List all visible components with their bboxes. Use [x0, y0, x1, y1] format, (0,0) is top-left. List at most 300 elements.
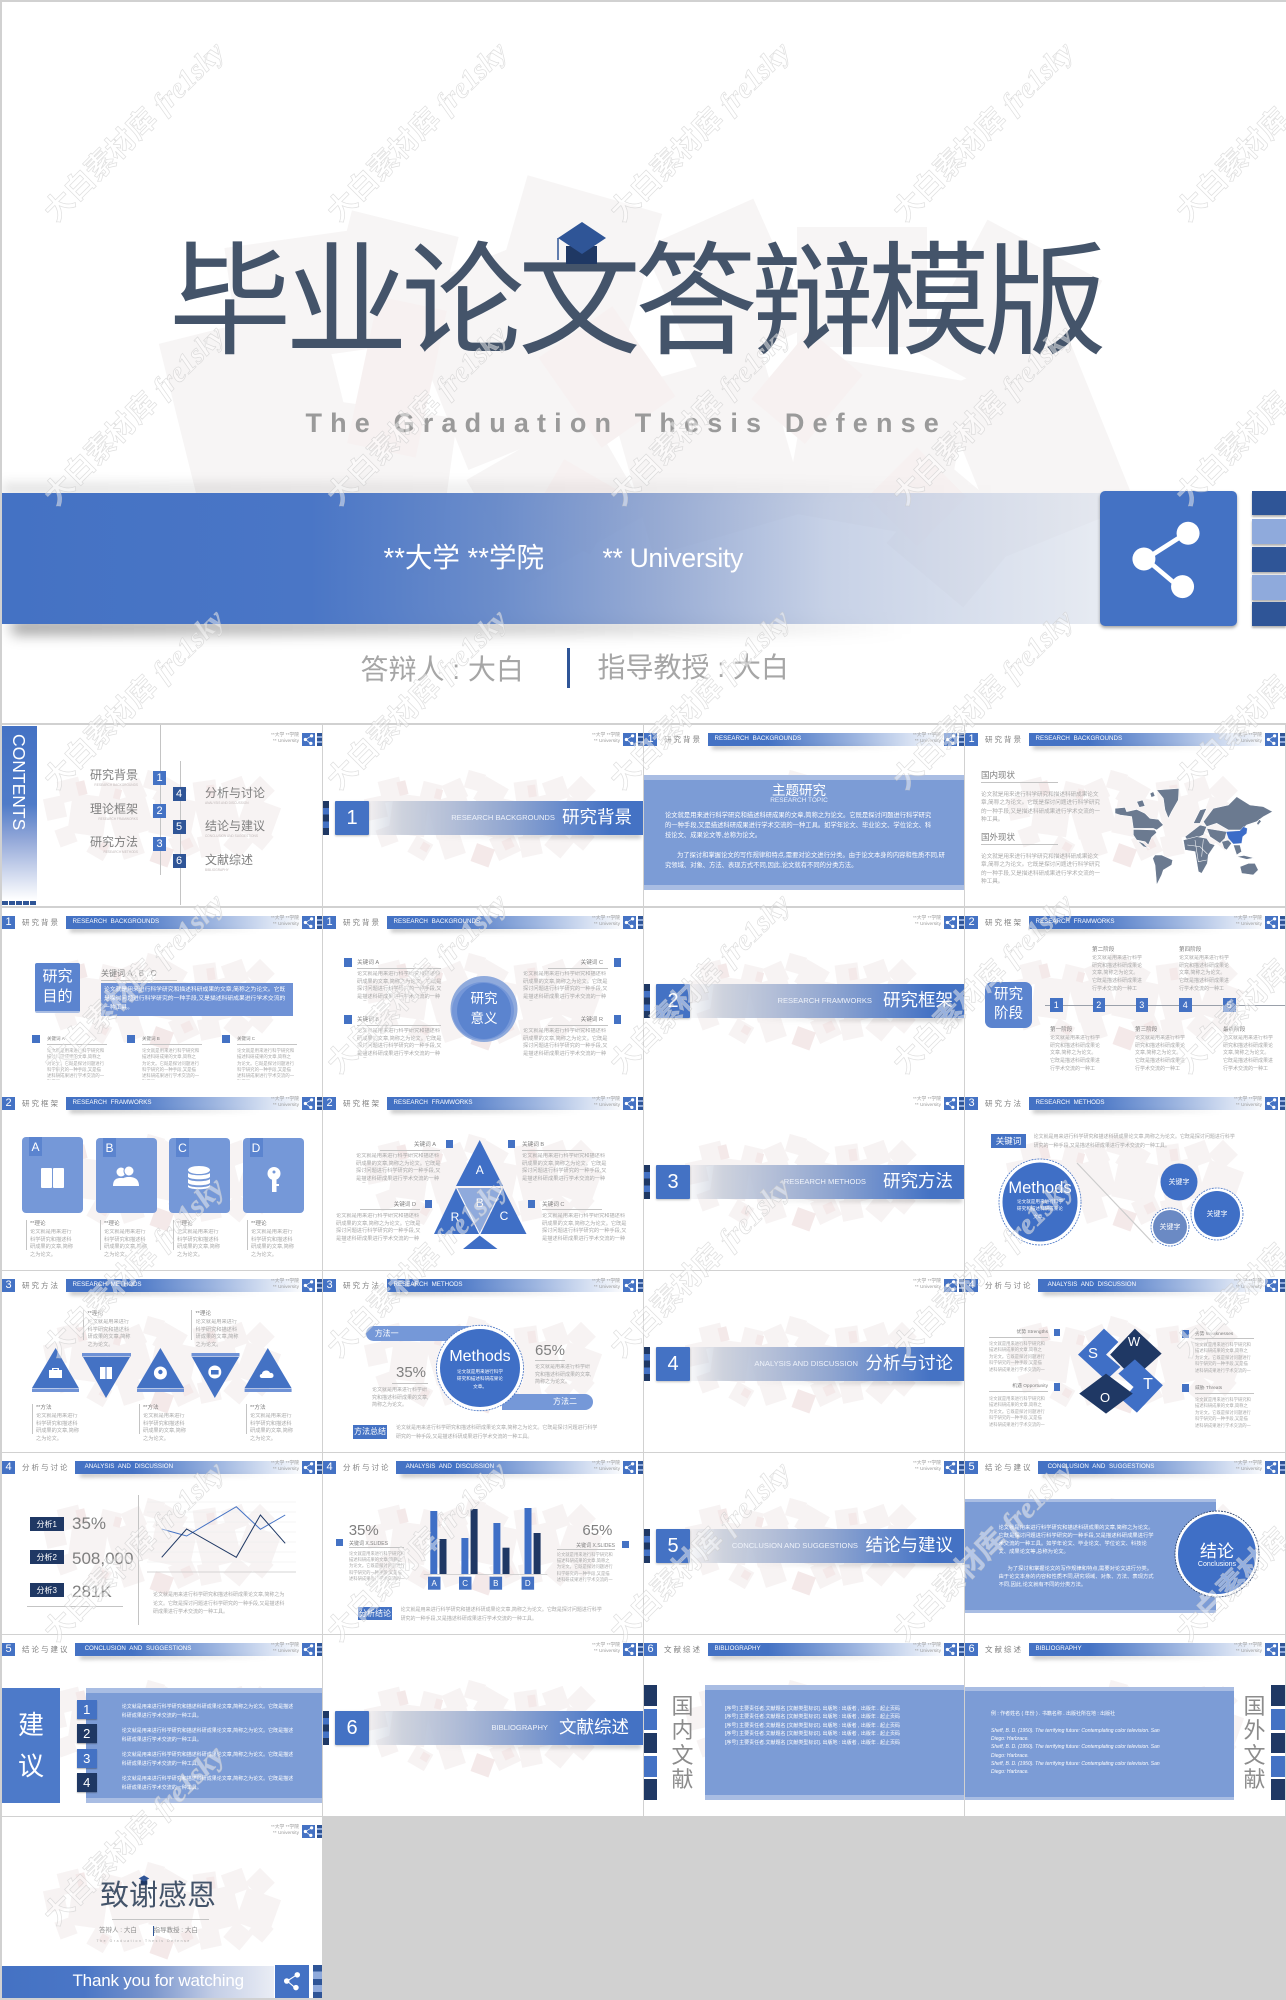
opportunity — [989, 1381, 1061, 1427]
stage 2 — [1092, 998, 1105, 1012]
bar chart: B — [493, 1579, 498, 1588]
corner mark — [585, 1095, 643, 1111]
citations: Diego: Harbrace. — [991, 1736, 1029, 1742]
header: BIBLIOGRAPHY — [1036, 1645, 1082, 1652]
top method 1: 论文就是用来进行科学研究和描述科研成果的文章,简称之为论文。 — [88, 1319, 130, 1348]
section banner — [644, 984, 964, 1024]
foreign label: 外 — [1243, 1718, 1266, 1743]
card C — [169, 1138, 230, 1213]
keyword heading — [101, 969, 177, 981]
panel: cover slide — [2, 2, 1286, 723]
watermark: 大白素材库 fre1sky — [604, 35, 797, 228]
card A — [22, 1137, 83, 1213]
header: 研究背景 — [985, 735, 1023, 744]
header: 分析与讨论 — [22, 1463, 70, 1472]
keyword circle 1: 关键字 — [1168, 1179, 1190, 1186]
card D: D — [252, 1140, 260, 1154]
item 4: ANALYSIS AND DISCUSSION — [205, 801, 249, 805]
item 1 — [77, 1700, 299, 1720]
header: 3 — [5, 1279, 12, 1291]
corner mark: **大学 **学院 — [592, 1643, 620, 1648]
header — [323, 1461, 623, 1474]
corner mark: ** University — [915, 1467, 941, 1472]
stages box: 阶段 — [994, 1006, 1023, 1022]
header: 2 — [326, 1097, 333, 1109]
theory C: **理论 — [177, 1221, 193, 1227]
header: 研究方法 — [985, 1099, 1023, 1108]
stage 4 — [1179, 998, 1192, 1012]
letter O: O — [1100, 1390, 1110, 1404]
top method 2: **理论 — [196, 1311, 211, 1317]
watermark: 大白素材库 fre1sky — [887, 1455, 1080, 1648]
watermark: 大白素材库 fre1sky — [321, 887, 514, 1080]
theory D — [247, 1219, 297, 1261]
header — [2, 916, 298, 934]
corner mark: ** University — [915, 922, 941, 927]
watermark: 大白素材库 fre1sky — [321, 35, 514, 228]
theory A — [26, 1219, 76, 1261]
corner mark — [906, 1459, 964, 1475]
header: 1 — [5, 916, 12, 928]
methods text: 论文就是用来进行科学研究和描述科研成果论文章。 — [1017, 1199, 1063, 1219]
strengths — [989, 1327, 1061, 1373]
circles diagram — [965, 1089, 1285, 1269]
section banner: 研究框架 — [883, 990, 953, 1010]
corner mark — [1227, 1277, 1285, 1293]
corner mark — [592, 914, 643, 929]
watermark: 大白素材库 fre1sky — [321, 319, 514, 512]
corner mark — [1234, 914, 1285, 929]
stage 2: 2 — [1096, 1000, 1101, 1010]
contents label: CONTENTS — [9, 734, 29, 830]
significance circle — [450, 976, 518, 1042]
header: RESEARCH BACKGROUNDS — [394, 918, 480, 925]
corner mark: ** University — [273, 922, 299, 927]
keyword circle 2: 关键字 — [1206, 1211, 1228, 1218]
section banner: ANALYSIS AND DISCUSSION — [754, 1359, 858, 1368]
theory D: 论文就是用来进行科学研究和描述科研成果的文章,简称之为论文。 — [251, 1229, 294, 1258]
suggestion panel — [86, 1688, 322, 1803]
right stat: 关键词 X.SLIDES — [576, 1542, 615, 1548]
header: 2 — [5, 1097, 12, 1109]
conclusion panel — [965, 1499, 1216, 1613]
block D — [336, 1199, 433, 1247]
bottom method 1: **方法 — [36, 1405, 52, 1411]
slide: SWOT — [965, 1271, 1284, 1452]
header: CONCLUSION AND SUGGESTIONS — [1048, 1463, 1154, 1470]
world map — [1115, 788, 1272, 884]
citations: Diego: Harbrace. — [991, 1769, 1029, 1775]
panel body 2: 为了探讨和掌握论文的写作规律和特点,需要对论文进行分类。由于论文本身的内容和性质不同,研究领域、对象、方法、表现方式不同,因此,论文就有不同的分类方法。 — [665, 852, 945, 869]
corner mark — [1234, 732, 1285, 746]
aim box: 目的 — [42, 988, 72, 1005]
corner mark: ** University — [594, 1649, 620, 1654]
watermark: 大白素材库 fre1sky — [887, 603, 1080, 796]
conclusion english: Conclusions — [1198, 1560, 1236, 1568]
corner mark: **大学 **学院 — [592, 1461, 620, 1466]
section banner: RESEARCH FRAMWORKS — [777, 996, 872, 1005]
weakness — [1182, 1330, 1254, 1376]
corner mark — [585, 1641, 643, 1657]
triangle diagram — [323, 1089, 643, 1269]
watermark: 大白素材库 fre1sky — [887, 35, 1080, 228]
corner mark — [906, 1641, 964, 1657]
thank-you banner — [2, 1966, 274, 1998]
corner mark: ** University — [1236, 1467, 1262, 1472]
header: 1 — [326, 916, 333, 928]
citations — [725, 1705, 925, 1747]
section banner: 研究方法 — [883, 1171, 953, 1191]
stage 3: 3 — [1139, 1000, 1144, 1010]
watermark: 大白素材库 fre1sky — [38, 319, 231, 512]
header — [2, 1643, 302, 1656]
header — [965, 1643, 1265, 1656]
item 1: 论文就是用来进行科学研究和描述科研成果论文章,简称之为论文。它既是描述科研成果进行学术交流的一种工具。 — [122, 1704, 293, 1719]
theory C: 论文就是用来进行科学研究和描述科研成果的文章,简称之为论文。 — [177, 1229, 220, 1258]
icon: share box — [275, 1965, 309, 1998]
pill: method one — [366, 1326, 469, 1341]
header: 研究背景 — [22, 918, 60, 927]
methods circle — [435, 1324, 525, 1412]
header: RESEARCH METHODS — [1036, 1099, 1105, 1106]
corner mark: **大学 **学院 — [913, 1097, 941, 1102]
section banner: RESEARCH METHODS — [784, 1177, 866, 1186]
corner mark: ** University — [273, 1467, 299, 1472]
triangle diagram: R — [451, 1210, 460, 1224]
domestic label: 献 — [671, 1767, 694, 1792]
header — [965, 1279, 1265, 1292]
item 2: RESEARCH FRAMWORKS — [98, 817, 138, 821]
slide: section 1 — [323, 725, 642, 906]
corner mark: **大学 **学院 — [271, 1097, 299, 1102]
column C — [222, 1035, 297, 1080]
corner mark — [906, 1095, 964, 1111]
block D — [523, 1015, 621, 1058]
block C: 关键词 C — [542, 1202, 564, 1208]
citations: [序号] 主要责任者.文献题名 [文献类型标识]. 出版地 : 出版者 , 出版年 . 起止页码 — [725, 1714, 900, 1720]
corner mark: **大学 **学院 — [1234, 1279, 1262, 1284]
stage text: fourth: 第四阶段 — [1179, 947, 1201, 953]
header: 研究框架 — [985, 918, 1023, 927]
watermark: 大白素材库 fre1sky — [887, 887, 1080, 1080]
stage 5 — [1223, 998, 1236, 1012]
background squares — [159, 176, 1130, 493]
summary tag: 分析结论 — [359, 1609, 391, 1618]
item 5: 5 — [176, 821, 182, 833]
bottom method 3 — [246, 1403, 296, 1445]
header — [323, 1097, 623, 1110]
section banner: 2 — [667, 990, 679, 1012]
corner mark: ** University — [273, 1649, 299, 1654]
corner mark — [585, 1277, 643, 1293]
aim box — [35, 963, 80, 1013]
header — [2, 1097, 302, 1110]
bottom method 1 — [32, 1403, 82, 1445]
header: RESEARCH METHODS — [72, 1281, 142, 1288]
corner mark: **大学 **学院 — [271, 1825, 299, 1830]
35 percent — [372, 1364, 432, 1414]
keyword tag — [991, 1134, 1026, 1148]
slide: section 4 — [644, 1271, 964, 1452]
slide: domestic literature — [644, 1635, 964, 1816]
item 5 — [173, 819, 265, 838]
keyword tag: 关键词 — [996, 1136, 1021, 1146]
section banner: RESEARCH BACKGROUNDS — [451, 813, 555, 822]
item 4: 论文就是用来进行科学研究和描述科研成果论文章,简称之为论文。它既是描述科研成果进行学术交流的一种工具。 — [122, 1776, 293, 1791]
header: 6 — [968, 1643, 975, 1655]
keyword heading: 关键词 A , B , C — [101, 969, 157, 978]
foreign status: 论文就是用来进行科学研究和描述科研成果论文章,简称之为论文。它既是探讨问题进行科学研究的一种手段,又是描述科研成果进行学术交流的一种工具。 — [981, 854, 1100, 885]
slide: foreign literature — [965, 1635, 1284, 1816]
item 3: 论文就是用来进行科学研究和描述科研成果论文章,简称之为论文。它既是描述科研成果进行学术交流的一种工具。 — [122, 1752, 293, 1767]
section banner — [323, 1705, 643, 1755]
section banner: BIBLIOGRAPHY — [491, 1723, 548, 1732]
summary text: 论文就是用来进行科学研究和描述科研成果论文章,简称之为论文。它既是探讨问题进行科学研究的一种手段,又是描述科研成果进行学术交流的一种工具。 — [396, 1425, 597, 1440]
item 1: RESEARCH BACKGROUNDS — [94, 783, 138, 787]
corner mark — [271, 914, 322, 929]
block B — [344, 1015, 442, 1058]
foreign label: 文 — [1243, 1743, 1266, 1768]
bar chart: D — [525, 1579, 531, 1588]
block B: 关键词 B — [357, 1017, 379, 1023]
stage text: first: 第一阶段 — [1050, 1027, 1072, 1033]
corner mark: **大学 **学院 — [271, 916, 299, 921]
watermark: 大白素材库 fre1sky — [887, 319, 1080, 512]
suggestion side box: 建 — [18, 1710, 44, 1740]
bottom method 2: **方法 — [143, 1405, 159, 1411]
metric 1: 分析1 — [37, 1520, 57, 1528]
panel english heading: RESEARCH TOPIC — [770, 797, 828, 804]
item 6: 文献综述 — [205, 853, 253, 867]
corner mark: ** University — [915, 1649, 941, 1654]
header: 1 — [647, 733, 654, 745]
header: 2 — [968, 916, 975, 928]
card D — [242, 1138, 304, 1213]
methods title: Methods — [1008, 1178, 1072, 1196]
item 2: 2 — [156, 805, 163, 817]
pill: method one: 方法一 — [375, 1329, 399, 1338]
item 6 — [173, 853, 253, 872]
advisor: 指导教授 : 大白 — [154, 1927, 198, 1934]
significance circle: 意义 — [470, 1011, 498, 1026]
domestic label: 内 — [671, 1718, 694, 1743]
citations: [序号] 主要责任者.文献题名 [文献类型标识]. 出版地 : 出版者 , 出版年 . 起止页码 — [725, 1731, 900, 1737]
domestic status — [981, 770, 1100, 823]
corner mark: ** University — [1236, 1103, 1262, 1108]
header: ANALYSIS AND DISCUSSION — [85, 1463, 173, 1470]
block D: 关键词 R — [581, 1017, 603, 1023]
foreign label: 国 — [1243, 1694, 1266, 1719]
side bar squares — [2, 901, 36, 905]
slide: research topic — [644, 725, 964, 906]
corner mark — [913, 914, 964, 929]
slide: conclusion — [965, 1453, 1284, 1634]
metric 1: 35% — [72, 1514, 106, 1533]
header: RESEARCH BACKGROUNDS — [72, 918, 159, 925]
65 percent — [535, 1342, 595, 1392]
item 6: 6 — [176, 855, 182, 867]
section banner: 3 — [667, 1171, 679, 1193]
section banner: 文献综述 — [559, 1717, 629, 1737]
stacked blocks — [1250, 491, 1286, 630]
watermark: 大白素材库 fre1sky — [887, 1171, 1080, 1364]
corner mark — [264, 1459, 322, 1475]
watermark: 大白素材库 fre1sky — [38, 887, 231, 1080]
bottom method 3: 论文就是用来进行科学研究和描述科研成果的文章,简称之为论文。 — [250, 1413, 293, 1442]
corner mark: ** University — [273, 1103, 299, 1108]
theory D: **理论 — [251, 1221, 267, 1227]
slide: research stages — [965, 908, 1284, 1088]
header: 4 — [968, 1279, 975, 1291]
header — [644, 1643, 944, 1656]
header: 研究框架 — [22, 1099, 60, 1108]
banner — [2, 493, 1102, 624]
section banner: CONCLUSION AND SUGGESTIONS — [732, 1541, 858, 1550]
opportunity: 机遇 Opportunity — [1012, 1384, 1048, 1389]
panel heading: 主题研究 — [772, 783, 826, 798]
corner mark: **大学 **学院 — [271, 1279, 299, 1284]
corner mark: ** University — [594, 1467, 620, 1472]
divider — [152, 1926, 154, 1936]
header: 分析与讨论 — [985, 1281, 1032, 1290]
35 percent: 论文就是用来进行科学研究和描述科研成果的文章,简称之为论文。 — [372, 1387, 428, 1408]
header: RESEARCH FRAMWORKS — [1036, 918, 1115, 925]
header: RESEARCH BACKGROUNDS — [1036, 735, 1122, 742]
corner mark: **大学 **学院 — [592, 916, 620, 921]
corner mark: **大学 **学院 — [1234, 1461, 1262, 1466]
letter W: W — [1128, 1334, 1140, 1348]
corner mark — [1227, 1459, 1285, 1475]
header: ANALYSIS AND DISCUSSION — [406, 1463, 494, 1470]
watermark: 大白素材库 fre1sky — [38, 35, 231, 228]
top method 2 — [191, 1309, 241, 1351]
side blocks — [644, 1685, 657, 1800]
keyword panel — [101, 983, 293, 1016]
item 5: CONCLUSION AND SUGGESTIONS — [205, 834, 258, 838]
section banner: 研究背景 — [562, 807, 632, 827]
thanks title: 致谢感恩 — [100, 1880, 216, 1912]
corner mark: **大学 **学院 — [1234, 1097, 1262, 1102]
panel body: 论文就是用来进行科学研究和描述科研成果的文章,简称之为论文。它既是探讨问题进行科学研究的一种手段,又是描述科研成果进行学术交流的一种工具。如学年论文、毕业论文、学位论文、科技论文、成果论文等,总称为论文。 — [665, 812, 931, 839]
column B — [127, 1035, 202, 1080]
section banner: 6 — [346, 1717, 358, 1739]
item 4 — [173, 786, 265, 805]
corner mark: ** University — [594, 739, 620, 744]
stage 3 — [1136, 998, 1148, 1012]
keyword text: 论文就是用来进行科学研究和描述科研成果论文章,简称之为论文。它既是探讨问题进行科学研究的一种手段,又是描述科研成果进行学术交流的一种工具。 — [1034, 1134, 1235, 1149]
header: 研究方法 — [343, 1281, 381, 1290]
citations: Diego: Harbrace. — [991, 1753, 1029, 1759]
section banner: 4 — [667, 1353, 679, 1375]
65 percent: 65% — [535, 1342, 565, 1359]
item 2: 论文就是用来进行科学研究和描述科研成果论文章,简称之为论文。它既是描述科研成果进行学术交流的一种工具。 — [122, 1728, 293, 1743]
title: 毕业论文答辩模版 — [168, 234, 1100, 371]
left stat — [336, 1521, 406, 1586]
slide: research significance — [323, 908, 642, 1088]
conclusion circle — [1174, 1510, 1260, 1598]
thank-you banner: Thank you for watching — [72, 1971, 244, 1990]
defender: 答辩人 : 大白 — [99, 1927, 137, 1934]
header — [2, 1279, 302, 1292]
header: RESEARCH FRAMWORKS — [72, 1099, 152, 1106]
suggestion side box — [2, 1688, 60, 1803]
corner mark: ** University — [1236, 1649, 1262, 1654]
watermark: 大白素材库 fre1sky — [38, 1171, 231, 1364]
letter S: S — [1088, 1344, 1098, 1362]
column B: 关键词 B — [142, 1036, 160, 1041]
corner mark: **大学 **学院 — [592, 733, 620, 738]
summary text: 论文就是用来进行科学研究和描述科研成果论文章,简称之为论文。它既是探讨问题进行科学研究的一种手段,又是描述科研成果进行学术交流的一种工具。 — [400, 1607, 602, 1622]
header: 分析与讨论 — [343, 1463, 390, 1472]
slide: line chart — [2, 1453, 322, 1634]
item 3: 研究方法 — [90, 835, 138, 849]
chart text: 论文就是用来进行科学研究和描述科研成果论文章,简称之为论文。它既是探讨问题进行科学研究的一种手段,又是描述科研成果进行学术交流的一种工具。 — [153, 1592, 284, 1615]
domestic status: 论文就是用来进行科学研究和描述科研成果论文章,简称之为论文。它既是探讨问题进行科学研究的一种手段,又是描述科研成果进行学术交流的一种工具。 — [981, 792, 1100, 823]
stages box: 研究 — [994, 987, 1023, 1003]
citation format: 例 : 作者姓名 ( 年份 ) . 书籍名称 . 出版社所在地 : 出版社 — [991, 1711, 1115, 1717]
domestic label — [671, 1695, 694, 1793]
corner mark: **大学 **学院 — [271, 1461, 299, 1466]
slide: section 2 — [644, 908, 964, 1088]
block A: 关键词 A — [357, 960, 379, 966]
corner mark: **大学 **学院 — [1234, 733, 1262, 738]
item 5: 结论与建议 — [205, 819, 265, 833]
corner mark: ** University — [273, 739, 299, 744]
stage 1: 1 — [1054, 1000, 1059, 1010]
item 4: 4 — [176, 788, 182, 800]
section banner — [644, 1341, 964, 1391]
corner mark — [906, 1277, 964, 1293]
icon: share box — [1100, 491, 1236, 626]
corner mark: ** University — [1236, 922, 1262, 927]
corner mark: ** University — [1236, 739, 1262, 744]
header: 研究背景 — [343, 918, 381, 927]
section banner — [644, 1523, 964, 1573]
item 3: RESEARCH METHODS — [103, 850, 138, 854]
header: 研究框架 — [343, 1099, 381, 1108]
watermark: 大白素材库 fre1sky — [321, 1171, 514, 1364]
banner text: university: **大学 **学院 — [384, 542, 544, 573]
stacked blocks — [313, 1965, 322, 1998]
metric 3 — [30, 1579, 120, 1603]
weakness: 劣势 Weaknesses — [1195, 1332, 1233, 1337]
column A: 关键词 A — [47, 1036, 65, 1041]
top method 1 — [83, 1309, 133, 1351]
metric 3: 分析3 — [37, 1586, 57, 1594]
SWOT diagram — [1078, 1327, 1163, 1414]
item 1: 研究背景 — [90, 768, 138, 782]
citations: [序号] 主要责任者.文献题名 [文献类型标识]. 出版地 : 出版者 , 出版年 . 起止页码 — [725, 1723, 900, 1729]
header: 4 — [326, 1461, 333, 1473]
header: 3 — [326, 1279, 333, 1291]
corner mark: ** University — [594, 1103, 620, 1108]
metric 2: 508,000 — [72, 1549, 133, 1568]
corner mark: ** University — [273, 1285, 299, 1290]
section banner — [644, 1159, 964, 1209]
column A — [32, 1035, 107, 1080]
item 6: BIBLIOGRAPHY — [205, 868, 229, 872]
foreign status: 国外现状 — [981, 832, 1015, 842]
slide: bar chart — [323, 1453, 642, 1634]
bottom method 3: **方法 — [250, 1405, 266, 1411]
header — [965, 916, 1262, 934]
stage text: third: 第三阶段 — [1135, 1027, 1157, 1033]
citations: Sheff, B. D. (1950). The terrifying future: Contemplating color television. San — [991, 1744, 1160, 1750]
defender: 答辩人 : 大白 — [360, 654, 524, 685]
keyword circle 3: 关键字 — [1160, 1224, 1180, 1231]
header: 研究方法 — [22, 1281, 60, 1290]
header: BIBLIOGRAPHY — [714, 1645, 761, 1652]
